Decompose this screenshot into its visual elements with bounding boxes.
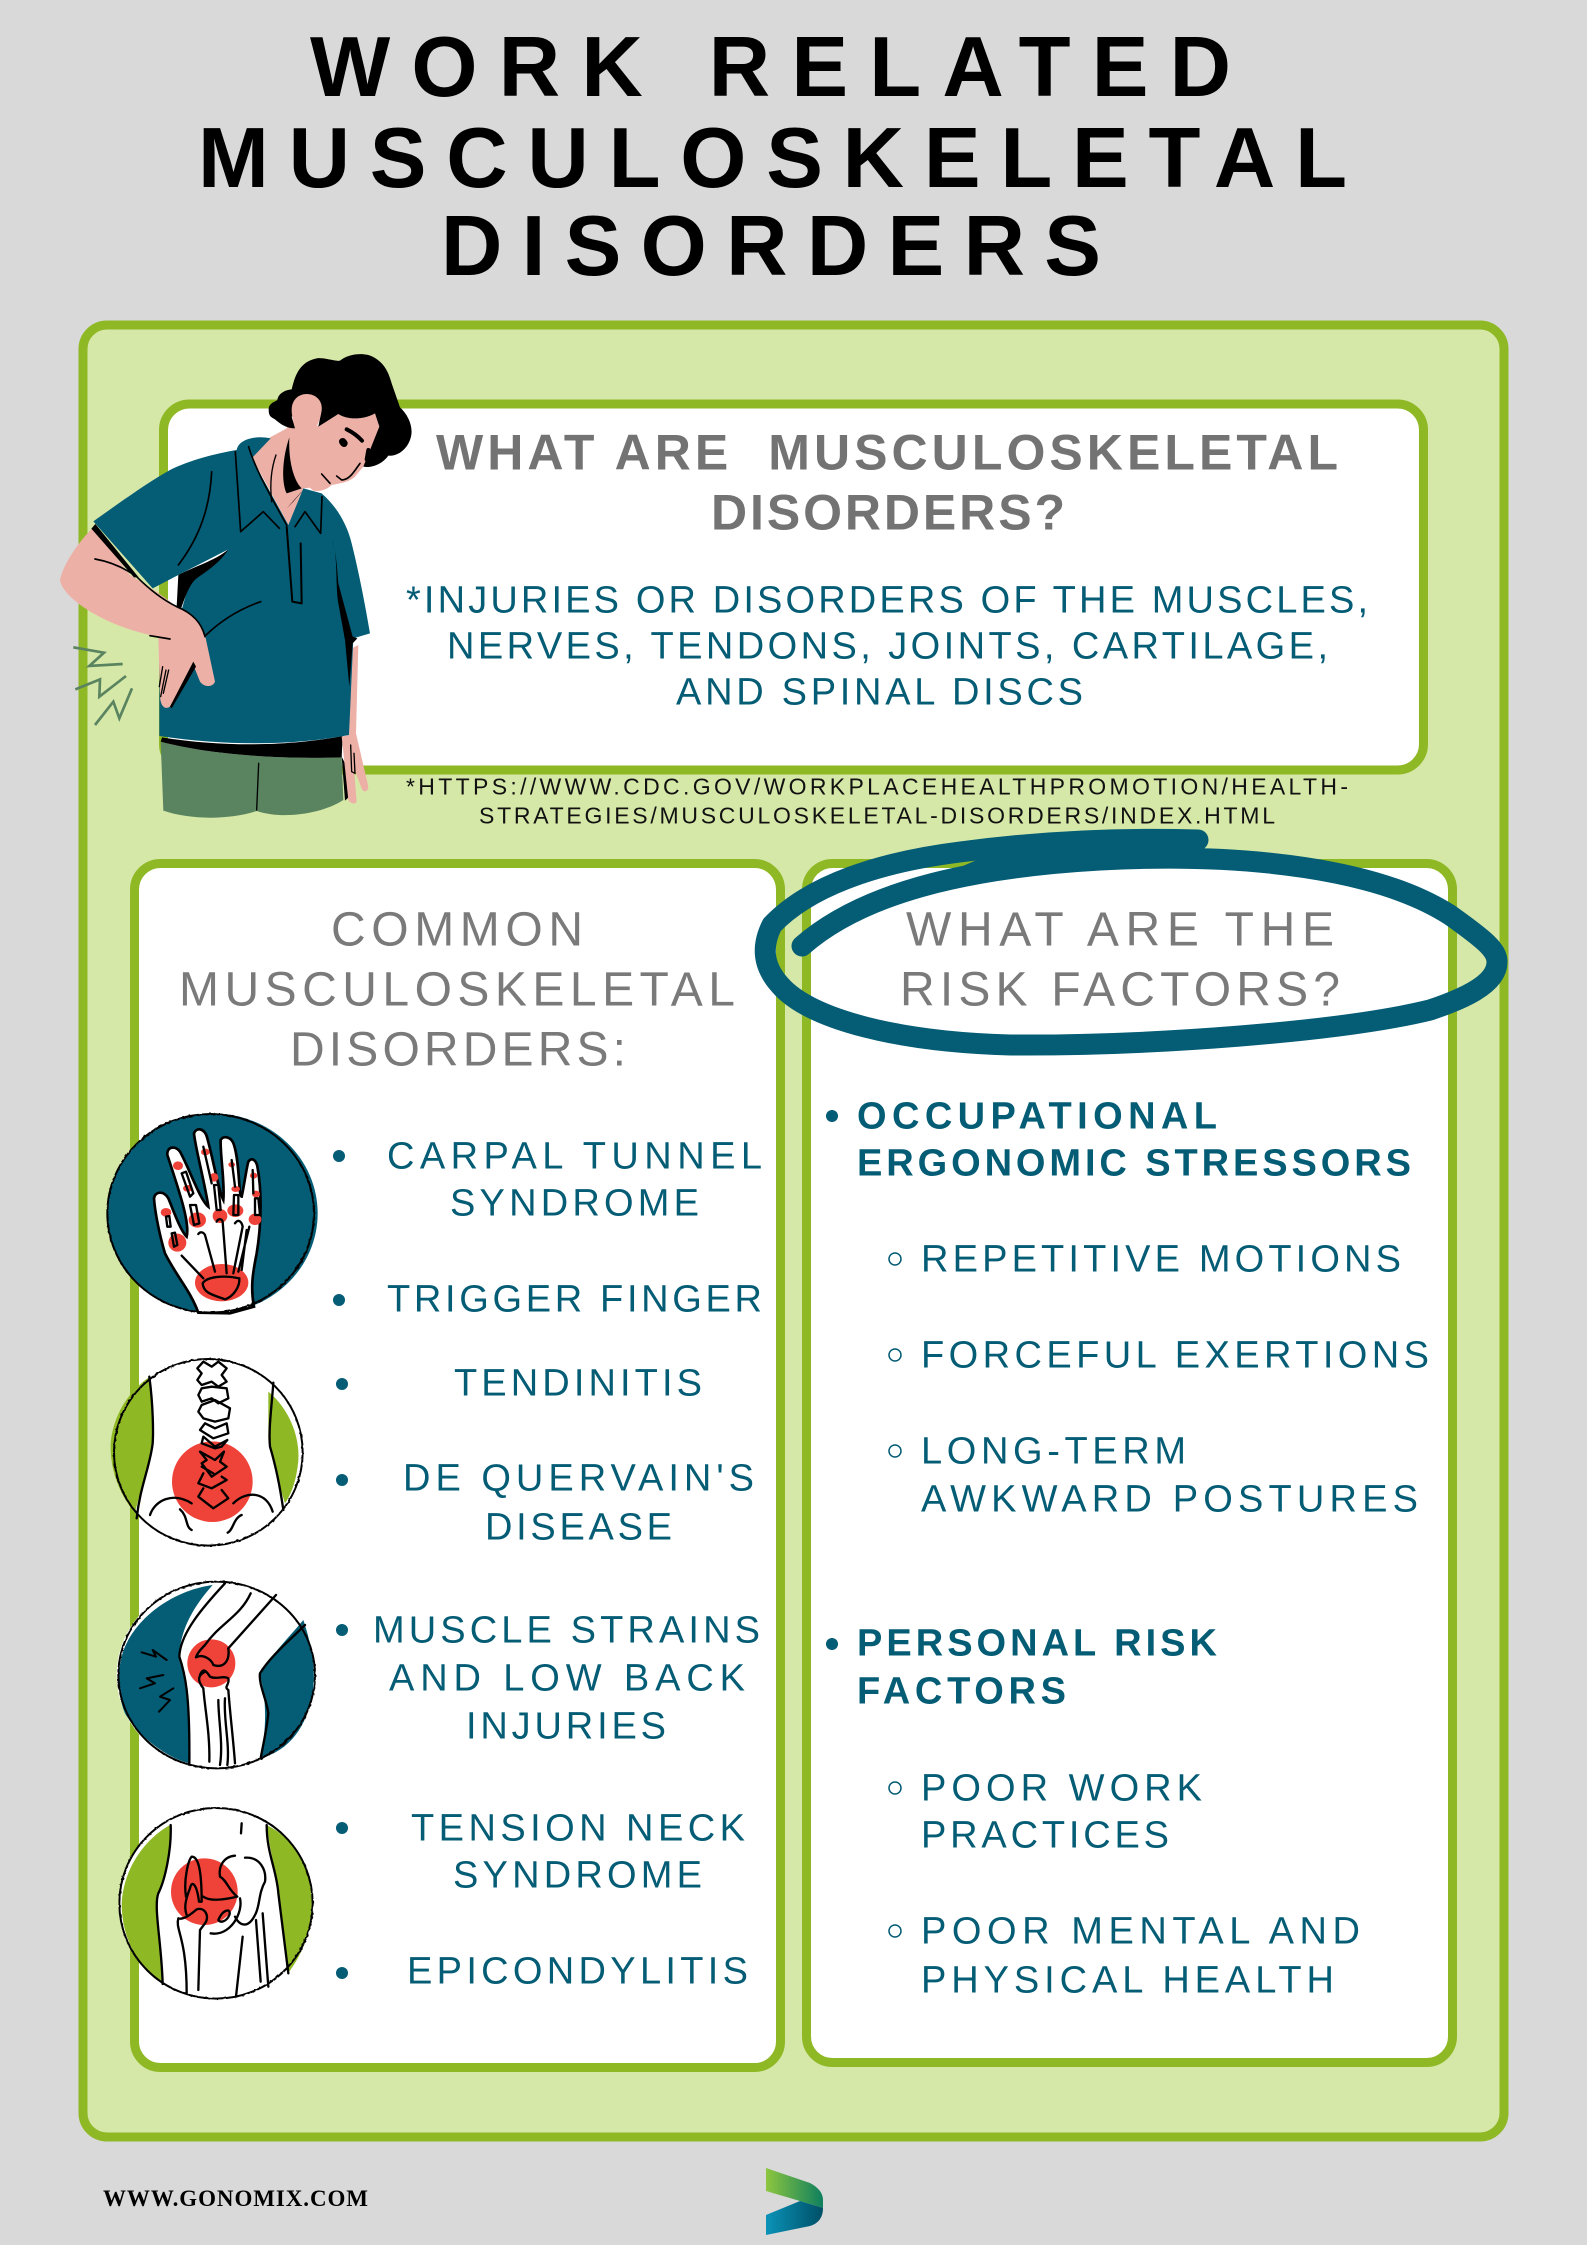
- disorder list: SYNDROME: [450, 1182, 699, 1224]
- occupational ergonomic stressors list: AWKWARD POSTURES: [921, 1478, 1418, 1520]
- definition text: *INJURIES OR DISORDERS OF THE MUSCLES,: [406, 580, 1368, 622]
- heading: what are the risk factors: [900, 904, 1340, 1016]
- icon: hip joint: [119, 1807, 313, 1999]
- disorder list: TENSION NECK: [411, 1808, 745, 1850]
- definition text: [406, 580, 1368, 714]
- personal risk factors list: POOR WORK: [921, 1768, 1202, 1810]
- disorder list: DISEASE: [485, 1506, 672, 1548]
- heading: common musculoskeletal disorders: MUSCULOSKELETAL: [179, 964, 735, 1016]
- disorder list: AND LOW BACK: [389, 1658, 745, 1700]
- personal risk factors list: PERSONAL RISK: [857, 1622, 1218, 1664]
- disorder list: [333, 1136, 762, 1992]
- icon: lower spine: [111, 1359, 303, 1546]
- heading: what are the risk factors: WHAT ARE THE: [906, 904, 1334, 956]
- disorder list: TRIGGER FINGER: [387, 1278, 762, 1320]
- disorder list: INJURIES: [466, 1706, 666, 1748]
- panel: outer green container: [83, 325, 1504, 2137]
- occupational ergonomic stressors list: OCCUPATIONAL: [857, 1096, 1217, 1138]
- hand-drawn circle around risk factors heading: [765, 835, 1497, 1045]
- panel: common disorders: [134, 864, 780, 2068]
- source citation: STRATEGIES/MUSCULOSKELETAL-DISORDERS/INDEX.HTML: [479, 802, 1275, 828]
- heading: common musculoskeletal disorders: COMMON: [331, 904, 583, 956]
- personal risk factors list: [826, 1622, 1360, 2002]
- heading: common musculoskeletal disorders: [179, 904, 735, 1076]
- occupational ergonomic stressors list: REPETITIVE MOTIONS: [921, 1238, 1401, 1280]
- icon: knee joint: [117, 1581, 317, 1769]
- occupational ergonomic stressors list: LONG-TERM: [921, 1430, 1186, 1472]
- icon: hand joints: [107, 1113, 318, 1313]
- heading: common musculoskeletal disorders: DISORDERS:: [290, 1024, 626, 1076]
- title: DISORDERS: [441, 199, 1101, 294]
- disorder list: TENDINITIS: [454, 1362, 702, 1404]
- definition text: NERVES, TENDONS, JOINTS, CARTILAGE,: [447, 626, 1328, 668]
- website address: WWW.GONOMIX.COM: [103, 2186, 368, 2211]
- panel: what are musculoskeletal disorders: [164, 404, 1424, 770]
- definition text: AND SPINAL DISCS: [676, 672, 1083, 714]
- occupational ergonomic stressors list: FORCEFUL EXERTIONS: [921, 1334, 1429, 1376]
- title: MUSCULOSKELETAL: [198, 111, 1347, 206]
- disorder list: EPICONDYLITIS: [407, 1950, 748, 1992]
- disorder list: SYNDROME: [453, 1854, 702, 1896]
- personal risk factors list: PRACTICES: [921, 1814, 1169, 1856]
- title: WORK RELATED: [310, 20, 1231, 115]
- heading: what are musculoskeletal disorders: WHAT ARE MUSCULOSKELETAL: [436, 424, 1338, 480]
- disorder list: MUSCLE STRAINS: [373, 1610, 760, 1652]
- logo mark: [766, 2168, 823, 2235]
- personal risk factors list: PHYSICAL HEALTH: [921, 1960, 1334, 2002]
- heading: what are musculoskeletal disorders: [436, 424, 1338, 540]
- source citation: *HTTPS://WWW.CDC.GOV/WORKPLACEHEALTHPROMOTION/HEALTH-: [406, 774, 1348, 800]
- occupational ergonomic stressors list: [826, 1096, 1429, 1520]
- heading: what are the risk factors: RISK FACTORS?: [900, 964, 1340, 1016]
- personal risk factors list: POOR MENTAL AND: [921, 1910, 1360, 1952]
- disorder list: CARPAL TUNNEL: [387, 1136, 762, 1178]
- panel: risk factors: [806, 864, 1452, 2062]
- occupational ergonomic stressors list: ERGONOMIC STRESSORS: [857, 1142, 1411, 1184]
- source citation: [406, 774, 1348, 828]
- heading: what are musculoskeletal disorders: DISORDERS?: [711, 484, 1065, 540]
- illustration: man holding his lower back: [60, 354, 412, 818]
- personal risk factors list: FACTORS: [857, 1670, 1066, 1712]
- disorder list: DE QUERVAIN'S: [403, 1458, 754, 1500]
- title: [198, 20, 1347, 294]
